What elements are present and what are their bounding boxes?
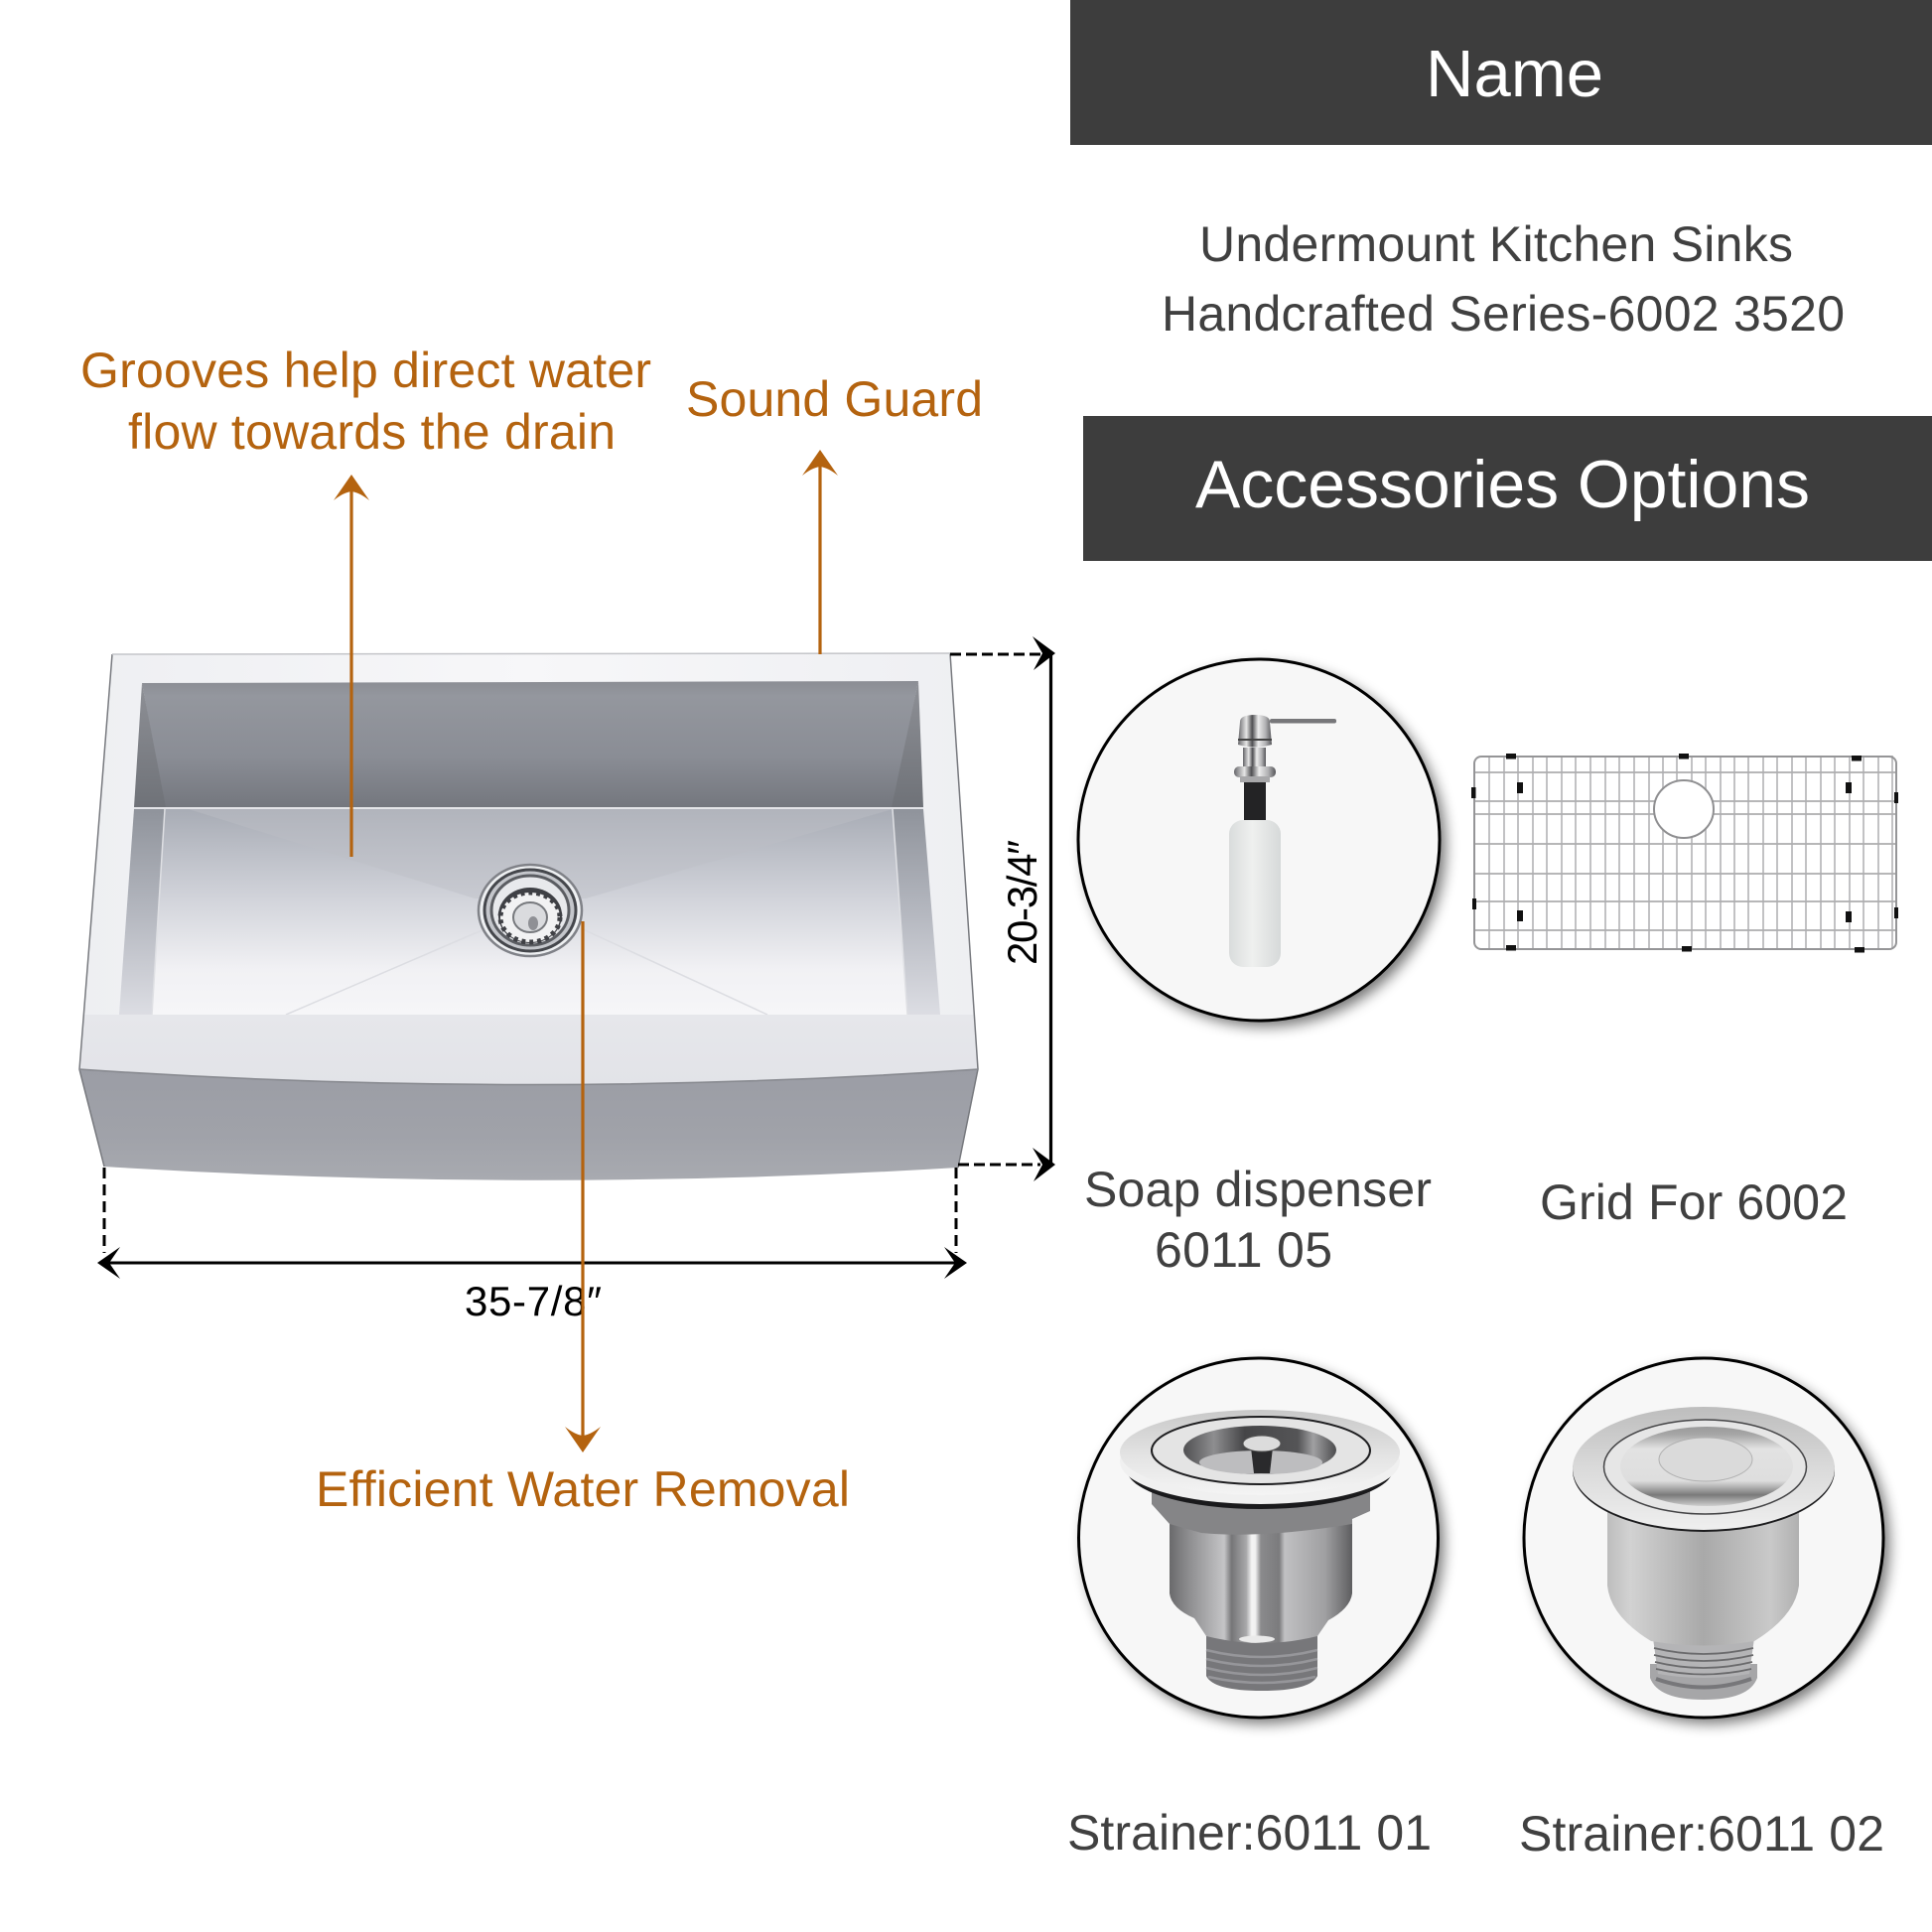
callout: grooves xyxy=(80,343,651,857)
strainer nut xyxy=(1650,1664,1757,1700)
accessory label: strainer 01: Strainer:6011 01 xyxy=(1067,1805,1432,1861)
sink illustration xyxy=(79,653,978,1180)
dimension: height: 20-3/4″ xyxy=(999,840,1045,965)
soap dispenser pump head xyxy=(1238,715,1272,747)
callout: sound guard: Sound Guard xyxy=(686,371,983,427)
dimension: width: 35-7/8″ xyxy=(465,1278,602,1324)
callout: grooves: flow towards the drain xyxy=(128,404,616,460)
sink front face xyxy=(79,1069,978,1180)
sink drain xyxy=(479,865,582,956)
soap dispenser spout xyxy=(1270,719,1336,723)
sink back wall xyxy=(142,681,918,807)
grid drain hole xyxy=(1654,780,1714,838)
header bar: Accessories Options: Accessories Options xyxy=(1195,447,1810,522)
soap dispenser tube xyxy=(1244,782,1266,824)
accessory: soap dispenser xyxy=(1078,659,1446,1027)
accessory label: soap dispenser: 6011 05 xyxy=(1155,1222,1332,1278)
dimension: width xyxy=(97,1168,967,1324)
strainer collar xyxy=(1152,1484,1370,1535)
sink rim xyxy=(79,653,978,1070)
product name text: Handcrafted Series-6002 3520 xyxy=(1162,286,1845,342)
sink left lip xyxy=(119,809,165,1015)
grid clips xyxy=(1471,754,1898,953)
product name text xyxy=(1162,216,1845,342)
accessory: grid xyxy=(1471,754,1898,953)
callout: grooves: Grooves help direct water xyxy=(80,343,651,398)
strainer button xyxy=(1659,1438,1752,1481)
accessory label: soap dispenser xyxy=(1084,1162,1432,1278)
strainer flange xyxy=(1120,1419,1400,1504)
accessory: strainer 6011 02 xyxy=(1524,1358,1889,1724)
callout: efficient water removal xyxy=(316,921,850,1517)
sink floor rear slope xyxy=(189,809,893,898)
header bar: Name: Name xyxy=(1426,37,1603,111)
accessory label: strainer 02: Strainer:6011 02 xyxy=(1519,1806,1884,1862)
sink right lip xyxy=(893,809,940,1015)
strainer thread xyxy=(1653,1638,1754,1678)
callout: sound guard xyxy=(686,371,983,654)
accessory label: soap dispenser: Soap dispenser xyxy=(1084,1162,1432,1217)
strainer knob xyxy=(1251,1448,1273,1473)
accessory label: grid: Grid For 6002 xyxy=(1540,1174,1848,1230)
strainer body xyxy=(1170,1519,1352,1643)
sink floor xyxy=(152,809,907,1015)
accessory: strainer 6011 01 xyxy=(1078,1358,1444,1724)
strainer thread xyxy=(1206,1628,1317,1691)
product name text: Undermount Kitchen Sinks xyxy=(1199,216,1793,272)
sink left wall xyxy=(134,683,166,807)
strainer body xyxy=(1607,1509,1799,1646)
strainer gasket xyxy=(1127,1430,1393,1509)
callout: efficient water removal: Efficient Water Removal xyxy=(316,1461,850,1517)
header bar: Accessories Options xyxy=(1083,416,1932,561)
soap dispenser bottle xyxy=(1229,820,1281,967)
sink apron xyxy=(79,1015,978,1085)
dimension: height xyxy=(950,636,1055,1181)
strainer flange xyxy=(1573,1409,1835,1532)
header bar: Name xyxy=(1070,0,1932,145)
sink right wall xyxy=(892,681,923,807)
